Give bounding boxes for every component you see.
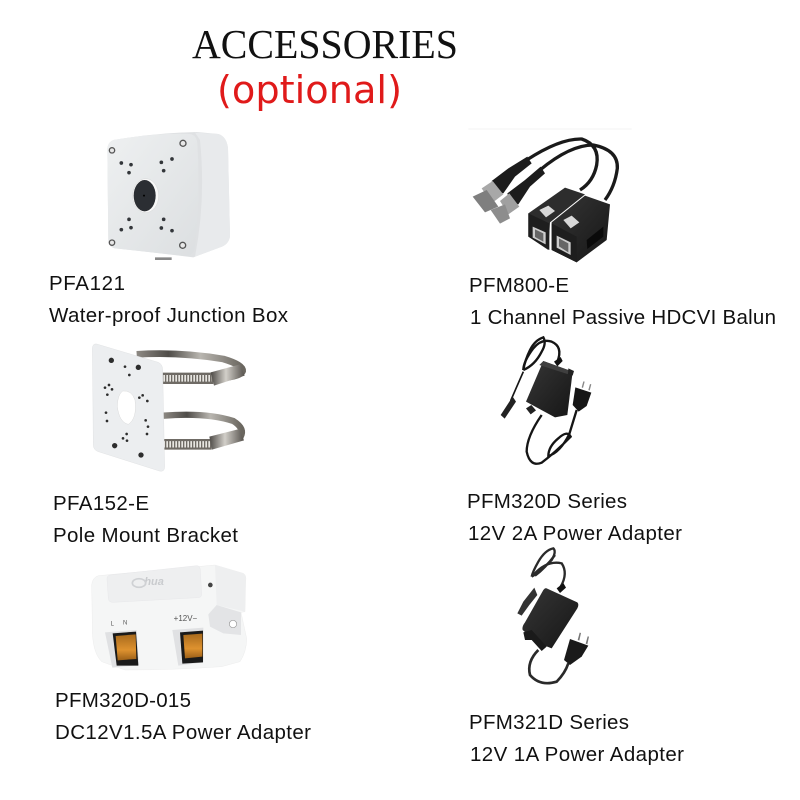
title: ACCESSORIES bbox=[192, 21, 458, 67]
product: DC power adapter module image: +12V− bbox=[174, 614, 198, 623]
label: PFM320D description: 12V 2A Power Adapter bbox=[468, 522, 682, 545]
label: junction box description: Water-proof Junction Box bbox=[49, 304, 289, 327]
product: DC power adapter module image bbox=[92, 565, 247, 670]
label: balun description: 1 Channel Passive HDCVI Balun bbox=[470, 306, 776, 329]
product: HDCVI balun image bbox=[468, 129, 632, 262]
label: PFM321D description: 12V 1A Power Adapter bbox=[470, 743, 684, 766]
product: PFM321D power adapter image bbox=[517, 548, 589, 683]
product: DC power adapter module image: hua bbox=[144, 576, 164, 588]
product: DC power adapter module image: L bbox=[111, 622, 115, 628]
label: bracket description: Pole Mount Bracket bbox=[53, 524, 238, 547]
subtitle: optional: (optional) bbox=[217, 68, 402, 112]
label: PFM321D Series: PFM321D Series bbox=[469, 711, 629, 734]
product: DC power adapter module image: N bbox=[123, 620, 127, 626]
product: PFM320D power adapter image bbox=[501, 337, 591, 464]
product: junction box image bbox=[107, 132, 230, 260]
label: PFM320D Series: PFM320D Series bbox=[467, 490, 627, 513]
label: PFA152-E: PFA152-E bbox=[53, 492, 149, 515]
product: pole mount bracket image bbox=[92, 344, 245, 471]
label: PFM320D-015: PFM320D-015 bbox=[55, 689, 191, 712]
label: module description: DC12V1.5A Power Adapter bbox=[55, 721, 311, 744]
label: PFM800-E: PFM800-E bbox=[469, 274, 569, 297]
label: PFA121: PFA121 bbox=[49, 272, 125, 295]
